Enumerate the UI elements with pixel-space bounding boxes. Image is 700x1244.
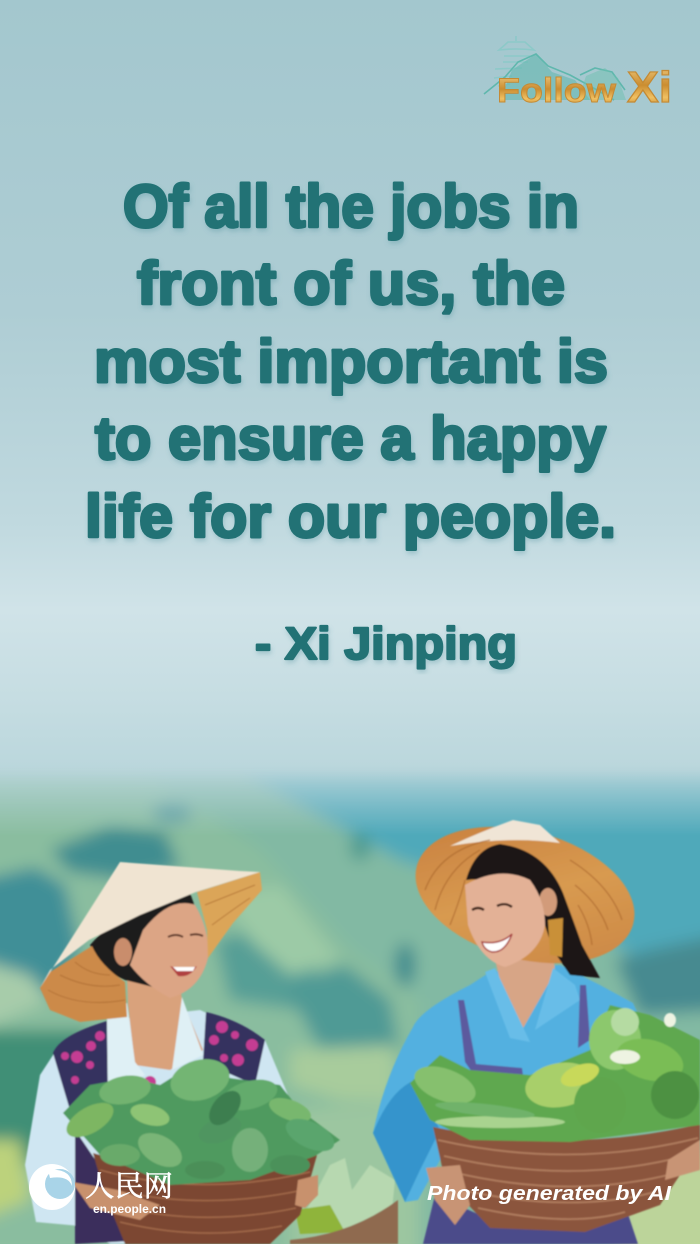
- logo characters: 人民网: [85, 1164, 173, 1205]
- left woman: floral vest: [53, 1012, 265, 1244]
- left woman: conical hat: [40, 862, 262, 1022]
- left woman: leafy greens: [61, 1053, 340, 1185]
- left woman: sleeves and blouse: [25, 1010, 300, 1244]
- attribution: Xi Jinping: - Xi Jinping: [255, 618, 517, 669]
- left woman: face: [114, 903, 208, 998]
- right woman: hands: [426, 1140, 700, 1225]
- figure: right woman: [373, 804, 700, 1244]
- right woman: hair: [466, 844, 600, 978]
- quote text: life for our people.: [85, 483, 616, 550]
- photo credit: Photo generated by AI: [427, 1183, 671, 1205]
- logo text: Follow: [497, 72, 617, 110]
- quote text: [85, 173, 616, 550]
- right woman: hat: [400, 804, 650, 986]
- figure: left woman: [25, 862, 340, 1244]
- right woman: collar: [485, 968, 580, 1042]
- right woman: leafy greens: [409, 1005, 700, 1142]
- quote text: most important is: [94, 328, 608, 395]
- logo: Follow Xi: Xi: [627, 63, 672, 112]
- quote text: front of us, the: [137, 250, 565, 317]
- logo: Follow Xi: [484, 36, 672, 112]
- right woman: ear and earring: [539, 888, 563, 957]
- logo icon: white globe swirl: [29, 1164, 75, 1210]
- left woman: hair: [90, 893, 198, 990]
- right woman: apron skirt: [423, 1195, 638, 1244]
- left woman: neck and chest: [127, 975, 203, 1070]
- left woman: collar: [107, 997, 203, 1095]
- background landscape: painted mountains: [0, 770, 700, 1244]
- right woman: apron bib and straps: [458, 985, 590, 1098]
- right woman: basket: [433, 1124, 700, 1232]
- right woman: blue shirt: [373, 965, 650, 1202]
- left woman: basket: [93, 1153, 317, 1244]
- right woman: face: [465, 874, 545, 967]
- background basket of greens: [290, 1158, 398, 1244]
- people.cn logo: [29, 1164, 173, 1216]
- logo url: en.people.cn: [93, 1204, 166, 1216]
- quote text: Of all the jobs in: [123, 173, 579, 240]
- logo icon: pagoda and mountains: [484, 36, 625, 100]
- right woman: neck: [495, 950, 555, 1030]
- left woman: hands: [72, 1175, 318, 1220]
- quote text: to ensure a happy: [95, 405, 607, 472]
